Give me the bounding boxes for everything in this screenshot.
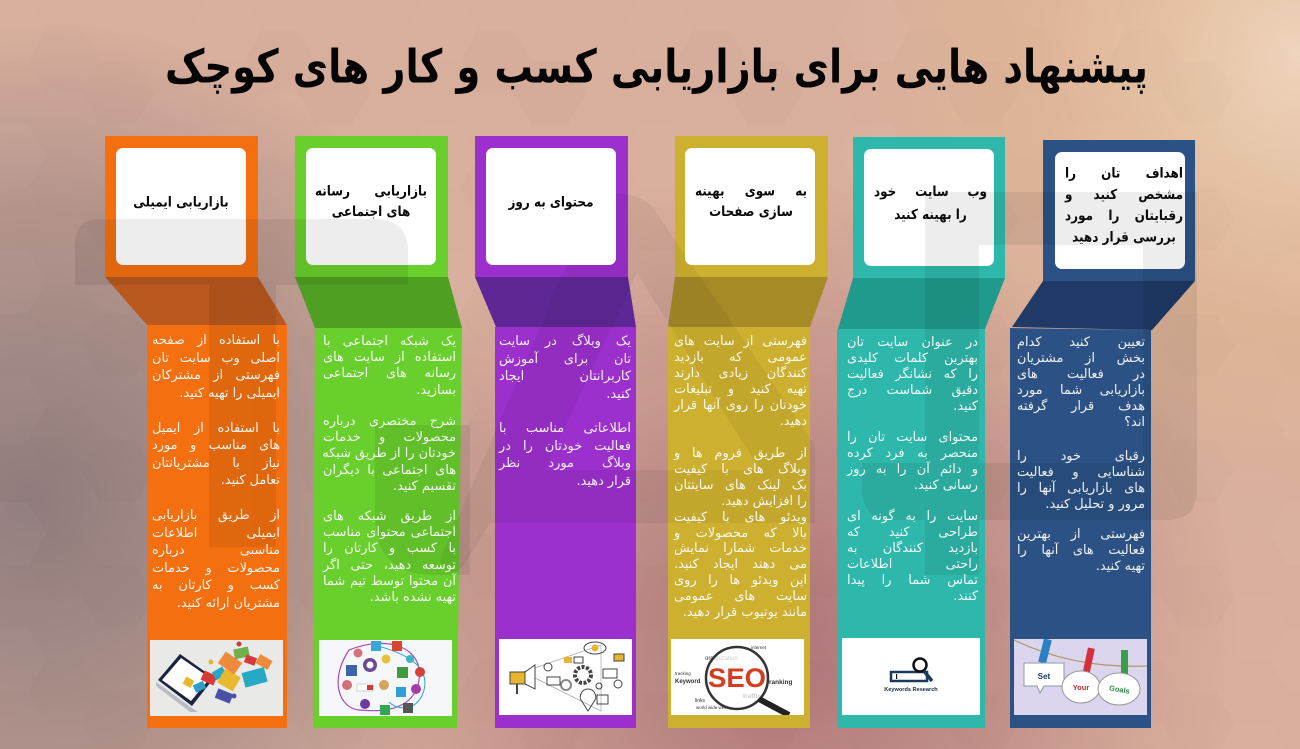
image: megaphone content marketing xyxy=(499,639,632,715)
image: SEO magnifier: organization xyxy=(705,656,738,662)
panel: optimize your website: در عنوان سایت تان xyxy=(847,335,978,350)
text block xyxy=(322,334,456,605)
image: SEO magnifier xyxy=(671,639,804,715)
panel: social media marketing: خودتان را از طریق شبکه xyxy=(322,446,456,461)
panel: set goals and review competitors: رقبای خود را xyxy=(1017,449,1145,464)
image: social network icons xyxy=(319,640,452,716)
heading: سازی صفحات xyxy=(709,203,793,219)
panel: email marketing: کسب و کارتان به xyxy=(152,578,280,593)
image: SEO magnifier: SEO xyxy=(708,663,766,693)
panel: social media marketing: اجتماعی محتوای مناسب xyxy=(323,525,456,540)
panel: page optimization: دهید. xyxy=(780,414,807,429)
panel: page optimization: خودتان را روی آنها قرار xyxy=(674,398,807,413)
panel: page optimization: خدمات شمارا نمایش xyxy=(674,541,807,556)
panel: page optimization: ویدئو های با کیفیت xyxy=(674,510,807,525)
panel: social media marketing: رسانه های اجتماعی xyxy=(323,366,456,381)
panel: optimize your website: را که نشانگر فعالیت xyxy=(847,367,978,382)
panel: fresh content xyxy=(475,136,636,728)
panel: set goals and review competitors: مرور و تحلیل کنید. xyxy=(1045,497,1145,512)
panel: email marketing: نیاز با مشتریانتان xyxy=(152,456,280,470)
panel: email marketing: از طریق بازاریابی xyxy=(152,508,280,523)
heading xyxy=(315,183,427,219)
panel: email marketing: با استفاده از صفحه xyxy=(152,333,280,348)
panel: fresh content: فعالیت خودتان را در xyxy=(499,439,631,454)
panel: optimize your website: سایت را به گونه ای xyxy=(847,509,978,524)
panel: social media marketing: از طریق شبکه های xyxy=(323,509,456,524)
text block xyxy=(1017,335,1145,574)
text block xyxy=(846,335,978,604)
panel: fresh content: قرار دهید. xyxy=(577,474,631,489)
panel: page optimization: بالا که محصولات و xyxy=(674,526,807,541)
image: keywords research xyxy=(842,638,980,715)
image: SEO magnifier: traffic xyxy=(743,693,761,700)
panel: email marketing: تعامل کنید. xyxy=(221,473,280,488)
image: SEO magnifier: world wide web xyxy=(696,705,727,710)
panel: page optimization: تهیه کنید و تبلیغات xyxy=(674,382,807,397)
image: set your goals: Goals xyxy=(1108,683,1130,696)
panel: social media marketing: تهیه نشده باشد. xyxy=(370,590,456,605)
panel: set goals and review competitors: اند؟ xyxy=(1124,415,1145,430)
panel: set goals and review competitors: تعیین کنید کدام xyxy=(1017,335,1145,350)
image: SEO magnifier: internet xyxy=(751,645,767,650)
panel: page optimization: این ویدئو ها را روی xyxy=(674,573,807,588)
panel: email marketing: با استفاده از ایمیل xyxy=(152,420,280,436)
heading: محتوای به روز xyxy=(508,194,594,210)
panel: optimize your website: و دائم آن را به روز xyxy=(847,462,978,477)
panel: social media marketing: آن محتوا توسط تیم شما xyxy=(323,574,456,589)
panel: page optimization xyxy=(668,136,828,728)
panel: set goals and review competitors xyxy=(1010,140,1195,728)
panel: email marketing: مشتریان ارائه کنید. xyxy=(177,596,280,610)
panel: page optimization: فهرستی از سایت های xyxy=(674,334,807,349)
heading xyxy=(1064,165,1183,245)
heading: وب سایت خود xyxy=(874,183,987,200)
image: SEO magnifier: tracking xyxy=(675,671,691,676)
panel: page optimization: را افزایش دهید. xyxy=(721,494,807,509)
panel: set goals and review competitors: های بازاریابی آنها را xyxy=(1017,481,1145,496)
panel: social media marketing: تقسیم کنید. xyxy=(393,479,456,494)
panel: fresh content: یک وبلاگ در سایت xyxy=(499,334,631,349)
heading: بازاریابی ایمیلی xyxy=(133,194,229,210)
heading: رقبایتان را مورد xyxy=(1065,208,1183,224)
heading: مشخص کنید و xyxy=(1065,186,1183,202)
panel: optimize your website: طراحی کنید که xyxy=(847,525,978,540)
panel: fresh content: کنید. xyxy=(606,387,631,402)
panel: social media marketing: های اجتماعی با دیگران xyxy=(323,463,456,478)
panel: email marketing: فهرستی از مشترکان xyxy=(152,368,280,383)
image: keywords research: Keywords Research xyxy=(884,687,938,693)
panel: social media marketing: محصولات و خدمات xyxy=(323,430,456,445)
panel: email marketing xyxy=(105,136,287,728)
panel: email marketing: مناسبی درباره xyxy=(152,543,280,558)
panel: email marketing: محصولات و خدمات xyxy=(152,560,280,576)
panel: optimize your website: منحصر به فرد کرده xyxy=(847,446,978,461)
panel: social media marketing: با کسب و کارتان را xyxy=(323,541,456,556)
panel: email marketing: ایمیلی اطلاعات xyxy=(152,526,280,540)
panel: page optimization: بک لینک های سایتتان xyxy=(674,478,807,493)
panel: set goals and review competitors: فعالیت های آنها را xyxy=(1017,543,1145,558)
text block xyxy=(673,334,808,620)
panel: page optimization: از طریق فروم ها و xyxy=(674,446,807,461)
panel: set goals and review competitors: فهرستی از بهترین xyxy=(1017,527,1145,542)
image: laptop with envelopes xyxy=(150,640,283,716)
heading: بازاریابی رسانه xyxy=(315,183,427,199)
text block xyxy=(498,333,632,489)
panel: optimize your website: راحتی اطلاعات xyxy=(847,557,978,572)
panel: social media marketing: استفاده از سایت های xyxy=(323,350,456,365)
panel: fresh content: اطلاعاتی مناسب با xyxy=(499,421,631,436)
heading: به سوی بهینه xyxy=(695,183,807,199)
heading xyxy=(695,183,807,220)
panel: optimize your website: رسانی کنید. xyxy=(914,478,978,493)
image: set your goals: Set xyxy=(1038,672,1051,681)
panel: fresh content: وبلاگ مورد نظر xyxy=(499,456,631,471)
panel: optimize your website: کنند. xyxy=(953,589,978,604)
heading: اهداف تان را xyxy=(1065,165,1183,181)
panel: page optimization: مانند یوتیوب قرار دهید. xyxy=(683,605,807,620)
panel: set goals and review competitors: در فعالیت های xyxy=(1017,367,1145,382)
panel: social media marketing: بسازید. xyxy=(416,383,456,398)
panel: optimize your website: کنید. xyxy=(953,399,978,414)
panel: page optimization: می دهند ایجاد کنید. xyxy=(674,557,807,572)
heading xyxy=(874,183,987,223)
panel: fresh content: تان برای آموزش xyxy=(499,352,631,367)
image: SEO magnifier: links xyxy=(695,698,706,704)
panel: page optimization: وبلاگ های با کیفیت xyxy=(674,462,807,477)
panel: optimize your website xyxy=(837,137,1005,728)
panel: social media marketing: یک شبکه اجتماعی با xyxy=(323,334,456,349)
panel: social media marketing: شرح مختصری درباره xyxy=(323,414,456,429)
panel: set goals and review competitors: شناسایی و فعالیت xyxy=(1017,465,1145,480)
image: SEO magnifier: Keyword xyxy=(675,679,701,685)
panel: social media marketing: توسعه دهید، حتی اگر xyxy=(323,558,456,573)
title: پیشنهاد هایی برای بازاریابی کسب و کار های کوچک xyxy=(165,40,1148,94)
panel: fresh content: کاربرانتان ایجاد xyxy=(499,369,631,384)
panel: optimize your website: محتوای سایت تان را xyxy=(847,430,978,445)
panel: page optimization: سایت های عمومی xyxy=(674,589,807,604)
heading: را بهینه کنید xyxy=(894,206,967,223)
panel: optimize your website: بهترین کلمات کلیدی xyxy=(847,351,978,366)
panel: optimize your website: بازدید کنندگان به xyxy=(847,541,978,556)
panel: page optimization: کنندگان زیادی دارند xyxy=(674,366,807,381)
panel: optimize your website: دقیق شماست درج xyxy=(847,383,978,398)
panel: set goals and review competitors: بخش از مشتریان xyxy=(1017,351,1145,366)
panel: email marketing: ایمیلی را تهیه کنید. xyxy=(179,386,280,400)
panel: set goals and review competitors: تهیه کنید. xyxy=(1096,559,1145,574)
text block xyxy=(152,333,280,610)
panel: optimize your website: تماس شما را پیدا xyxy=(847,573,978,588)
image: set your goals: Your xyxy=(1073,683,1089,692)
panel: set goals and review competitors: هدف قرار گرفته xyxy=(1017,399,1145,414)
heading: های اجتماعی xyxy=(332,203,410,219)
image: SEO magnifier: ranking xyxy=(769,679,793,686)
panel: social media marketing xyxy=(295,136,462,728)
panel: email marketing: های مناسب و مورد xyxy=(152,438,280,453)
panel: set goals and review competitors: بازاریابی شما مورد xyxy=(1017,383,1145,398)
image: set your goals xyxy=(1014,639,1147,715)
panel: page optimization: عمومی که بازدید xyxy=(674,350,807,365)
heading: بررسی قرار دهید xyxy=(1072,229,1176,245)
panel: email marketing: اصلی وب سایت تان xyxy=(152,350,280,366)
